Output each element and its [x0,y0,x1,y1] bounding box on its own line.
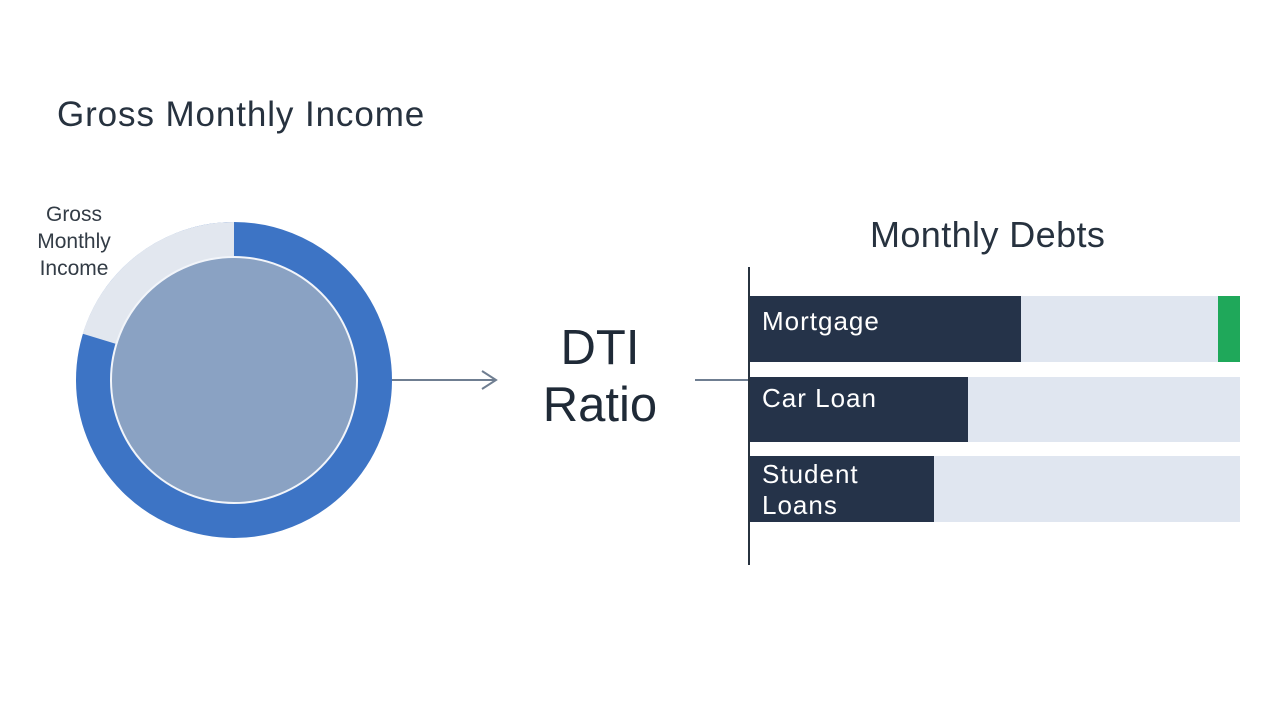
bar: mortgage: Mortgage [762,306,880,336]
donut label: Gross [46,203,102,226]
bar: student loans: Student [762,459,859,489]
donut label [37,203,111,280]
DTI Ratio text: Ratio [543,378,657,432]
bar: mortgage [750,296,1240,362]
arrow: income to ratio [392,370,498,390]
heading: Monthly Debts: Monthly Debts [870,214,1105,255]
title: Gross Monthly Income [57,95,425,134]
donut label: Income [40,257,108,280]
bar: car loan: Car Loan [762,383,877,413]
DTI Ratio text: DTI [561,321,639,375]
bar chart: debts [748,267,1240,565]
bar: car loan [750,377,1240,442]
donut label: Monthly [37,230,111,253]
DTI Ratio text [543,321,657,432]
bar: student loans: Loans [762,490,838,520]
bar: student loans [750,456,1240,522]
connector line [695,379,750,381]
